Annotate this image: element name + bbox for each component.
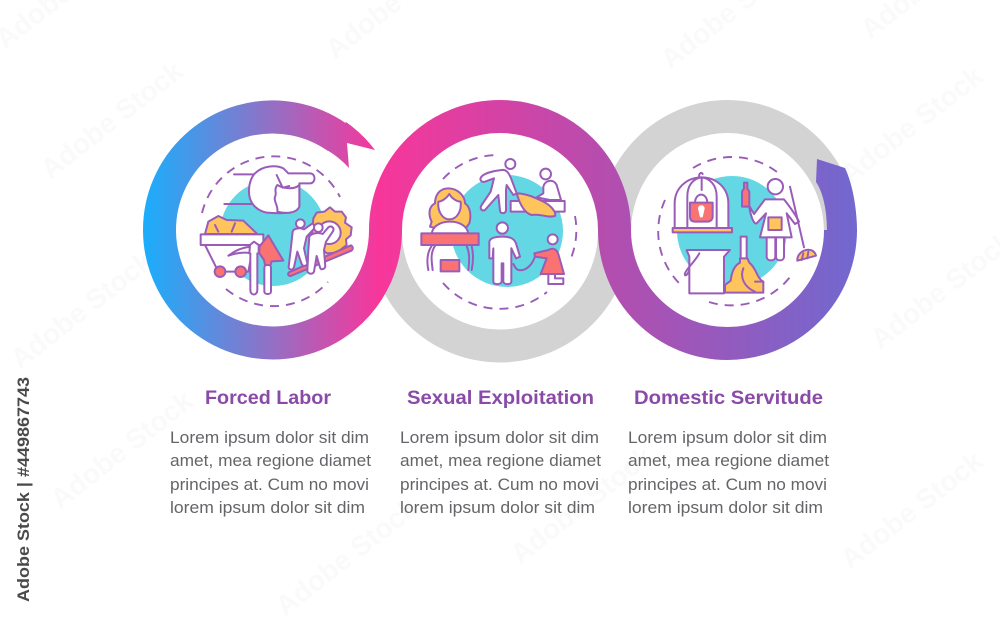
grey lower arc (386, 232, 614, 346)
stock id label: Adobe Stock | #449867743 (14, 377, 33, 602)
ribbon tail (816, 159, 857, 232)
illustration (421, 159, 565, 284)
column: sexual exploitation (400, 388, 601, 517)
body text: Lorem ipsum dolor sit dim (170, 429, 369, 447)
icon group: forced labor (201, 156, 353, 306)
watermark: Adobe Stock (835, 445, 989, 575)
body text: principes at. Cum no movi (400, 476, 599, 494)
icon group: domestic servitude (658, 157, 816, 305)
watermark: Adobe Stock (5, 245, 159, 375)
body text (400, 429, 601, 517)
body text: principes at. Cum no movi (170, 476, 369, 494)
body text: Lorem ipsum dolor sit dim (400, 429, 599, 447)
grey upper arc (614, 116, 840, 232)
teal circle (677, 176, 787, 286)
illustration (673, 173, 816, 293)
teal circle (451, 175, 563, 287)
icon group: sexual exploitation (421, 155, 576, 309)
column: domestic servitude (628, 388, 829, 517)
heading: Sexual Exploitation (407, 388, 594, 409)
watermark: Adobe Stock (35, 55, 189, 185)
body text: principes at. Cum no movi (628, 476, 827, 494)
grey ribbon (386, 116, 840, 346)
watermark: Adobe Stock (505, 440, 659, 570)
body text: amet, mea regione diamet (400, 452, 601, 470)
body text (628, 429, 829, 517)
ribbon body (160, 116, 840, 343)
dashed ring (443, 155, 576, 309)
body text: lorem ipsum dolor sit dim (170, 499, 365, 517)
heading: Forced Labor (205, 388, 332, 409)
body text: amet, mea regione diamet (170, 452, 371, 470)
body text: amet, mea regione diamet (628, 452, 829, 470)
dashed ring (658, 157, 793, 305)
teal circle (220, 180, 326, 286)
body text: lorem ipsum dolor sit dim (400, 499, 595, 517)
illustration (201, 166, 353, 294)
heading: Domestic Servitude (634, 388, 823, 409)
body text: Lorem ipsum dolor sit dim (628, 429, 827, 447)
gradient ribbon (160, 116, 857, 343)
column: forced labor (170, 388, 371, 517)
watermark: Adobe Stock (45, 385, 199, 515)
arrow head (327, 122, 375, 168)
body text: lorem ipsum dolor sit dim (628, 499, 823, 517)
body text (170, 429, 371, 517)
watermark: Adobe Stock (835, 60, 989, 190)
dashed ring (202, 156, 340, 306)
